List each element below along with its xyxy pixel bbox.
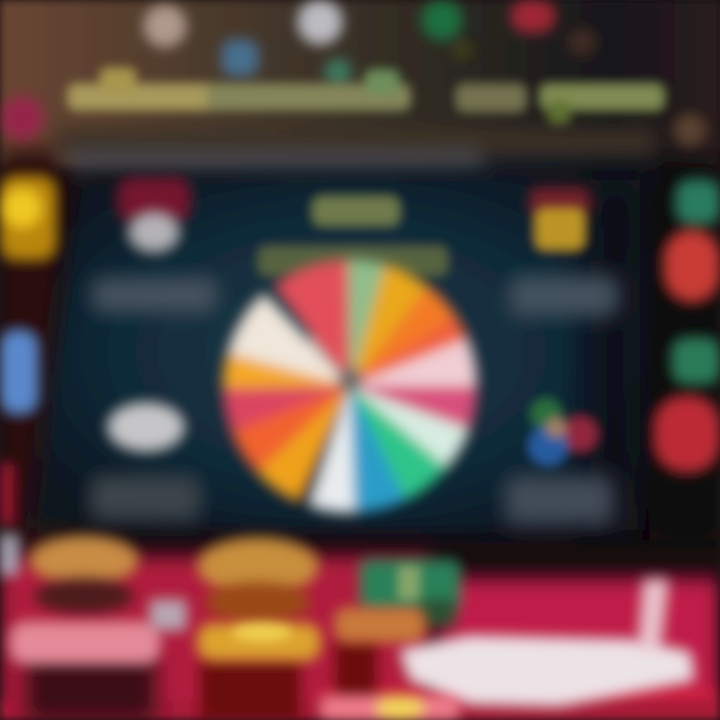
- icon: top-right yellow badge with caption: [510, 188, 618, 316]
- icon: white tray on the table: [400, 580, 694, 706]
- icon: lower-right multicolour badge with caption: [505, 398, 613, 524]
- panel: dark display board: [30, 168, 652, 535]
- title: illegible blurred yellow-green headline band: [68, 68, 664, 124]
- table: crimson foreground surface: [0, 556, 720, 720]
- icon: glowing cup at bottom edge: [320, 696, 460, 720]
- icon: green box with orange drink: [335, 560, 460, 642]
- pie chart: prize wheel: [261, 297, 439, 475]
- icon: top-left red and white badge with caption: [92, 178, 217, 312]
- icon: right edge red and green ornaments: [654, 180, 720, 472]
- icon: left edge yellow and blue game tiles: [0, 176, 56, 524]
- heading: illegible blurred label above wheel: [258, 196, 448, 276]
- icon: lower-left white badge with caption: [90, 403, 200, 520]
- icon: left burger and drink: [0, 535, 186, 720]
- top row of blurred icons: [0, 0, 706, 146]
- icon: centre burger and drink: [198, 538, 377, 720]
- board frame top strip: [55, 128, 655, 174]
